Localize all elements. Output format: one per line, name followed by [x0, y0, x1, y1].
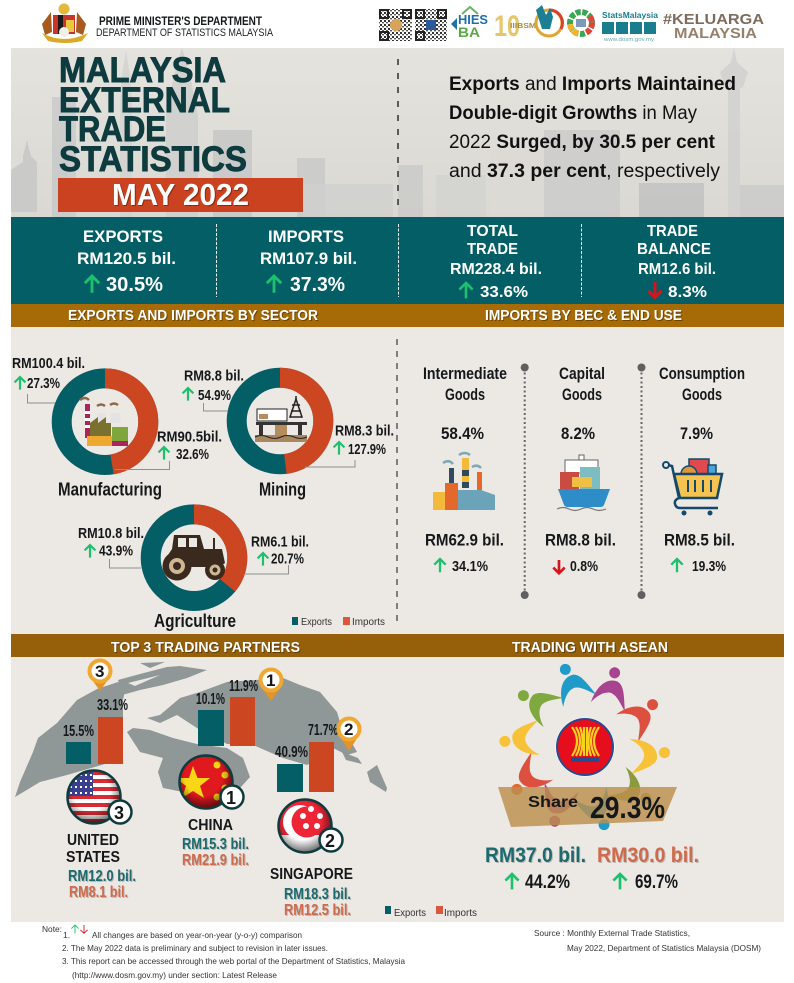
- ASEAN exports value: RM37.0 bil.: [485, 844, 586, 867]
- legend: sector: Exports: [301, 616, 332, 628]
- label: manufacturing: Manufacturing: [58, 480, 162, 500]
- icon: national crest: [42, 4, 88, 43]
- ASEAN exports value: [485, 844, 586, 893]
- label: mining: Mining: [259, 480, 306, 500]
- icon: US flag: [66, 769, 132, 825]
- label: Singapore: SINGAPORE: [270, 866, 353, 883]
- label: manufacturing exports: 27.3%: [27, 375, 60, 392]
- label: China: CHINA: [188, 817, 233, 834]
- hero headline: and 37.3 per cent, respectively: [449, 161, 721, 182]
- chart: China bars: [196, 678, 258, 746]
- indicator: trade balance: [637, 223, 716, 301]
- indicator: trade balance: 8.3%: [668, 284, 707, 301]
- column: intermediate goods: Goods: [445, 386, 485, 404]
- indicator: imports: IMPORTS: [268, 227, 344, 246]
- notes: All changes are based on year-on-year (y-o-y) comparison: [92, 930, 302, 940]
- section header bar: partners and ASEAN: TRADING WITH ASEAN: [512, 639, 668, 656]
- label: agriculture exports: 43.9%: [99, 542, 133, 560]
- column: capital goods: Goods: [562, 386, 602, 404]
- label: mining exports: [183, 368, 244, 411]
- label: Singapore: [270, 866, 353, 919]
- label: United States: RM12.0 bil.: [68, 868, 136, 885]
- section header bar: sector and BEC: [11, 304, 784, 327]
- icon: China flag: 1: [226, 788, 236, 808]
- icon: US flag: 3: [114, 803, 124, 823]
- column: intermediate goods: [423, 365, 507, 575]
- chart: manufacturing donut: [12, 355, 222, 500]
- indicator: exports: 30.5%: [106, 274, 163, 296]
- label: manufacturing imports: RM90.5bil.: [157, 428, 222, 446]
- icon: cargo ship: [557, 455, 610, 510]
- icon: QR code 1: [379, 9, 412, 41]
- source: Source : Monthly External Trade Statistics,: [534, 928, 690, 938]
- column: consumption goods: [659, 365, 745, 575]
- logo: SDG wheel: [570, 12, 592, 34]
- icon: tractor: [162, 535, 225, 580]
- legend: partners: [385, 906, 477, 919]
- legend: partners: Exports: [394, 907, 426, 919]
- icon: map pin 1: 1: [266, 671, 275, 690]
- hero headline: 2022 Surged, by 30.5 per cent: [449, 132, 716, 153]
- chart: Singapore bars: 40.9%: [275, 744, 308, 761]
- panel: exports and imports by sector: [12, 355, 394, 631]
- indicator: trade balance: BALANCE: [637, 241, 711, 258]
- logo: Keluarga Malaysia: #KELUARGA: [663, 11, 764, 28]
- label: China: RM15.3 bil.: [182, 836, 249, 853]
- label: manufacturing exports: [12, 355, 85, 403]
- notes: 1.: [63, 930, 70, 940]
- indicator: total trade: 33.6%: [480, 284, 528, 301]
- label: manufacturing imports: [115, 428, 222, 470]
- label: agriculture: Agriculture: [154, 611, 236, 631]
- indicator: total trade: [450, 223, 542, 301]
- hero headline: [449, 74, 736, 182]
- ASEAN imports value: 69.7%: [635, 872, 678, 893]
- icon: Singapore flag: 2: [325, 831, 335, 851]
- title: MALAYSIA: [59, 51, 226, 90]
- section header bar: sector and BEC: EXPORTS AND IMPORTS BY SECTOR: [68, 307, 318, 324]
- indicator: exports: RM120.5 bil.: [77, 249, 176, 268]
- label: China: RM21.9 bil.: [182, 852, 249, 869]
- ASEAN exports value: 44.2%: [525, 872, 570, 893]
- panel: imports by BEC and end use: [423, 364, 745, 599]
- notes: [42, 924, 405, 980]
- panel: hero with skyline: [11, 48, 784, 218]
- notes: 3. This report can be accessed through the web portal of the Department of Statistics, Malaysia: [62, 956, 405, 966]
- column: capital goods: [545, 365, 616, 575]
- column: intermediate goods: RM62.9 bil.: [425, 530, 504, 550]
- label: mining imports: 127.9%: [348, 441, 386, 458]
- column: capital goods: RM8.8 bil.: [545, 530, 616, 550]
- source: [534, 928, 761, 953]
- logo: Keluarga Malaysia: [663, 11, 764, 42]
- panel: trading with ASEAN: [485, 658, 699, 893]
- icon: map pin 3: 3: [95, 662, 104, 681]
- label: United States: STATES: [66, 849, 120, 866]
- panel: sectors and BEC background: [11, 327, 784, 634]
- title: STATISTICS: [59, 140, 247, 179]
- skyline illustration: [11, 48, 784, 218]
- chart: Singapore bars: 71.7%: [308, 722, 338, 739]
- logo: StatsMalaysia social: StatsMalaysia: [602, 11, 659, 20]
- chart: China bars: 11.9%: [229, 678, 258, 695]
- icon: map pin 2: 2: [344, 720, 353, 739]
- label: United States: [66, 832, 136, 901]
- icon: ASEAN emblem: [556, 718, 614, 776]
- chart: mining donut: [183, 368, 394, 500]
- chart: United States bars: 15.5%: [63, 723, 94, 740]
- date banner: [58, 177, 303, 212]
- icon: China flag: [176, 754, 244, 810]
- section header bar: partners and ASEAN: TOP 3 TRADING PARTNERS: [111, 639, 300, 656]
- indicator: total trade: TOTAL: [467, 223, 518, 240]
- ASEAN imports value: RM30.0 bil.: [597, 844, 699, 867]
- column: capital goods: Capital: [559, 365, 605, 383]
- logo: Keluarga Malaysia: MALAYSIA: [674, 25, 757, 42]
- source: May 2022, Department of Statistics Malaysia (DOSM): [567, 943, 761, 953]
- section header bar: sector and BEC: IMPORTS BY BEC & END USE: [485, 307, 682, 324]
- title: EXTERNAL: [59, 81, 230, 120]
- hero headline: Double-digit Growths in May: [449, 103, 697, 124]
- column: intermediate goods: Intermediate: [423, 365, 507, 383]
- indicator: imports: RM107.9 bil.: [260, 249, 357, 268]
- indicator: exports: [77, 227, 176, 296]
- logo: 10 years gold: IIIBSM: [510, 23, 536, 30]
- panel: key indicators: [11, 217, 784, 304]
- icon: shopping cart: [663, 459, 722, 516]
- label: agriculture imports: [245, 534, 309, 574]
- label: United States: RM8.1 bil.: [69, 884, 128, 901]
- chart: agriculture donut: [78, 514, 309, 631]
- column: consumption goods: RM8.5 bil.: [664, 530, 735, 550]
- icon: Singapore flag: [277, 798, 342, 855]
- legend: sector: [292, 616, 385, 628]
- label: mining exports: RM8.8 bil.: [184, 368, 244, 384]
- column: consumption goods: Goods: [682, 386, 722, 404]
- indicator: trade balance: TRADE: [647, 223, 698, 240]
- indicator: imports: 37.3%: [290, 274, 345, 296]
- label: agriculture imports: RM6.1 bil.: [251, 534, 309, 550]
- label: Singapore: RM18.3 bil.: [284, 886, 351, 903]
- logo: HIES BA 2022: BA: [458, 24, 480, 40]
- indicator: imports: [260, 227, 357, 296]
- title: [59, 51, 247, 179]
- indicator: total trade: TRADE: [467, 241, 518, 258]
- panel: top 3 trading partners: [15, 660, 477, 919]
- hero divider: [397, 59, 399, 208]
- column: consumption goods: 19.3%: [692, 558, 726, 575]
- column: consumption goods: Consumption: [659, 365, 745, 383]
- icon: map pin 3: [88, 660, 112, 691]
- share banner: 29.3%: [590, 790, 665, 825]
- column: intermediate goods: 58.4%: [441, 424, 484, 443]
- label: China: [182, 817, 249, 869]
- title: TRADE: [59, 110, 166, 149]
- icon: factory: [80, 398, 128, 446]
- panel: partners and ASEAN background: [11, 657, 784, 922]
- label: mining imports: [305, 422, 394, 467]
- notes: Note:: [42, 924, 62, 934]
- indicator: trade balance: RM12.6 bil.: [638, 261, 716, 278]
- logo: HIES BA 2022: HIES: [458, 12, 488, 27]
- column: consumption goods: 7.9%: [680, 424, 713, 443]
- legend: partners: Imports: [444, 907, 477, 919]
- header: crest and department name: [42, 4, 274, 43]
- icon: map pin 1: [259, 670, 283, 701]
- header: crest and department name: DEPARTMENT OF STATISTICS MALAYSIA: [96, 27, 274, 39]
- section header bar: partners and ASEAN: [11, 634, 784, 657]
- icon: QR code 2: [415, 9, 447, 41]
- icon: map pin 2: [337, 718, 361, 751]
- divider: dotted connector 1: [521, 364, 529, 599]
- logo: HIES BA 2022: [451, 7, 488, 40]
- header: partner logos: [379, 5, 764, 43]
- world map: [15, 662, 387, 798]
- label: mining exports: 54.9%: [198, 387, 231, 404]
- icon: industry: [433, 453, 495, 510]
- indicator: exports: EXPORTS: [83, 227, 163, 246]
- hero headline: Exports and Imports Maintained: [449, 74, 736, 95]
- chart: United States bars: [63, 697, 128, 764]
- label: United States: UNITED: [67, 832, 119, 849]
- chart: China bars: 10.1%: [196, 691, 225, 708]
- logo: StatsMalaysia social: [602, 11, 659, 43]
- label: manufacturing exports: RM100.4 bil.: [12, 355, 85, 372]
- legend: sector: Imports: [352, 616, 385, 628]
- ASEAN imports value: [597, 844, 699, 893]
- notes: 2. The May 2022 data is preliminary and subject to revision in later issues.: [62, 943, 328, 953]
- column: capital goods: 8.2%: [561, 424, 595, 443]
- logo: hand and circle: [536, 5, 562, 36]
- icon: ASEAN people wreath: [499, 658, 671, 836]
- logo: 10 years gold: 10: [494, 10, 520, 43]
- logo: StatsMalaysia social: www.dosm.gov.my: [604, 37, 655, 43]
- label: agriculture imports: 20.7%: [271, 550, 304, 568]
- column: intermediate goods: 34.1%: [452, 558, 488, 575]
- icon: note arrows: [71, 925, 88, 933]
- notes: (http://www.dosm.gov.my) under section: Latest Release: [72, 970, 277, 980]
- date banner: MAY 2022: [112, 177, 249, 212]
- share banner: Share: [528, 794, 578, 811]
- label: manufacturing imports: 32.6%: [176, 446, 209, 463]
- label: Singapore: RM12.5 bil.: [284, 902, 351, 919]
- share banner: [498, 787, 677, 827]
- indicator: total trade: RM228.4 bil.: [450, 261, 542, 278]
- column: capital goods: 0.8%: [570, 558, 598, 575]
- divider: dotted connector 2: [638, 364, 646, 599]
- chart: United States bars: 33.1%: [97, 697, 128, 714]
- department name: PRIME MINISTER'S DEPARTMENT: [99, 14, 263, 28]
- icon: oil rig: [255, 396, 307, 442]
- label: mining imports: RM8.3 bil.: [335, 422, 394, 440]
- chart: Singapore bars: [275, 722, 338, 792]
- label: agriculture exports: [78, 525, 144, 568]
- label: agriculture exports: RM10.8 bil.: [78, 525, 144, 542]
